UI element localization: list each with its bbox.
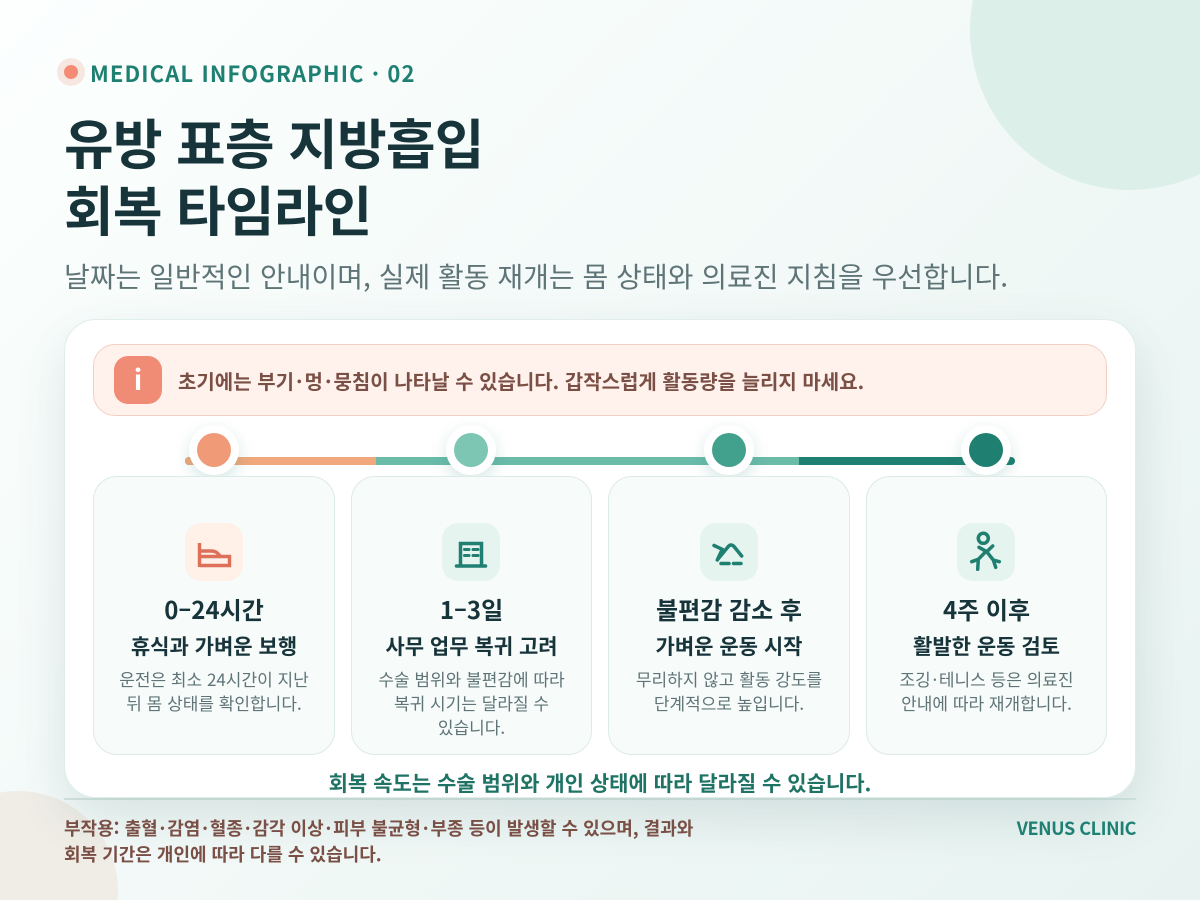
panel: step 3 — [608, 476, 850, 755]
subtitle: 날짜는 일반적인 안내이며, 실제 활동 재개는 몸 상태와 의료진 지침을 우선합니다. — [64, 256, 1008, 296]
side effects note: 회복 기간은 개인에 따라 다를 수 있습니다. — [64, 841, 382, 867]
footer divider — [64, 798, 1136, 800]
step 3 description — [636, 666, 822, 715]
icon: info: i — [134, 359, 142, 399]
panel: step 2 — [351, 476, 592, 755]
step 3 description: 무리하지 않고 활동 강도를 — [636, 666, 822, 691]
step 2 description: 있습니다. — [438, 714, 505, 739]
timeline node 2 — [446, 425, 496, 475]
timeline note: 회복 속도는 수술 범위와 개인 상태에 따라 달라질 수 있습니다. — [329, 768, 871, 798]
eyebrow — [57, 57, 416, 89]
step 1 description: 뒤 몸 상태를 확인합니다. — [126, 690, 302, 715]
title: 유방 표층 지방흡입 — [64, 101, 484, 180]
timeline bar — [185, 457, 1015, 465]
step 2 description — [378, 666, 565, 739]
panel: timeline — [64, 319, 1136, 798]
step 1 heading: 휴식과 가벼운 보행 — [131, 631, 297, 661]
panel: step 1 — [93, 476, 335, 755]
step 1 period: 0–24시간 — [164, 591, 264, 626]
step 4 heading: 활발한 운동 검토 — [913, 631, 1060, 661]
icon: light exercise — [700, 523, 758, 581]
step 2 description: 복귀 시기는 달라질 수 — [394, 690, 549, 715]
icon: runner — [957, 523, 1015, 581]
step 4 description: 안내에 따라 재개합니다. — [901, 690, 1072, 715]
title: 회복 타임라인 — [64, 168, 372, 247]
step 3 description: 단계적으로 높입니다. — [654, 690, 804, 715]
title — [64, 101, 484, 247]
step 3 period: 불편감 감소 후 — [656, 591, 802, 626]
icon: info — [114, 356, 162, 404]
callout: notice — [93, 344, 1107, 416]
notice text: 초기에는 부기·멍·뭉침이 나타날 수 있습니다. 갑작스럽게 활동량을 늘리지 마세요. — [178, 366, 864, 395]
timeline node 4 — [961, 425, 1011, 475]
step 3 heading: 가벼운 운동 시작 — [656, 631, 802, 661]
side effects note — [64, 815, 693, 867]
step 4 period: 4주 이후 — [943, 591, 1030, 626]
timeline node 3 — [704, 425, 754, 475]
panel: step 4 — [866, 476, 1107, 755]
step 1 description: 운전은 최소 24시간이 지난 — [119, 666, 309, 691]
decorative circle: bottom left — [0, 791, 118, 900]
eyebrow dot — [57, 58, 85, 86]
icon: desk — [442, 523, 500, 581]
step 2 heading: 사무 업무 복귀 고려 — [385, 631, 558, 661]
step 4 description: 조깅·테니스 등은 의료진 — [899, 666, 1074, 691]
decorative circle: top right — [970, 0, 1200, 190]
timeline node 1 — [189, 425, 239, 475]
eyebrow text: MEDICAL INFOGRAPHIC · 02 — [90, 57, 416, 89]
icon: bed — [185, 523, 243, 581]
brand: VENUS CLINIC — [1017, 815, 1136, 841]
step 1 description — [119, 666, 309, 715]
step 2 period: 1–3일 — [440, 591, 503, 626]
side effects note: 부작용: 출혈·감염·혈종·감각 이상·피부 불균형·부종 등이 발생할 수 있으며, 결과와 — [64, 815, 693, 841]
step 4 description — [899, 666, 1074, 715]
step 2 description: 수술 범위와 불편감에 따라 — [378, 666, 565, 691]
